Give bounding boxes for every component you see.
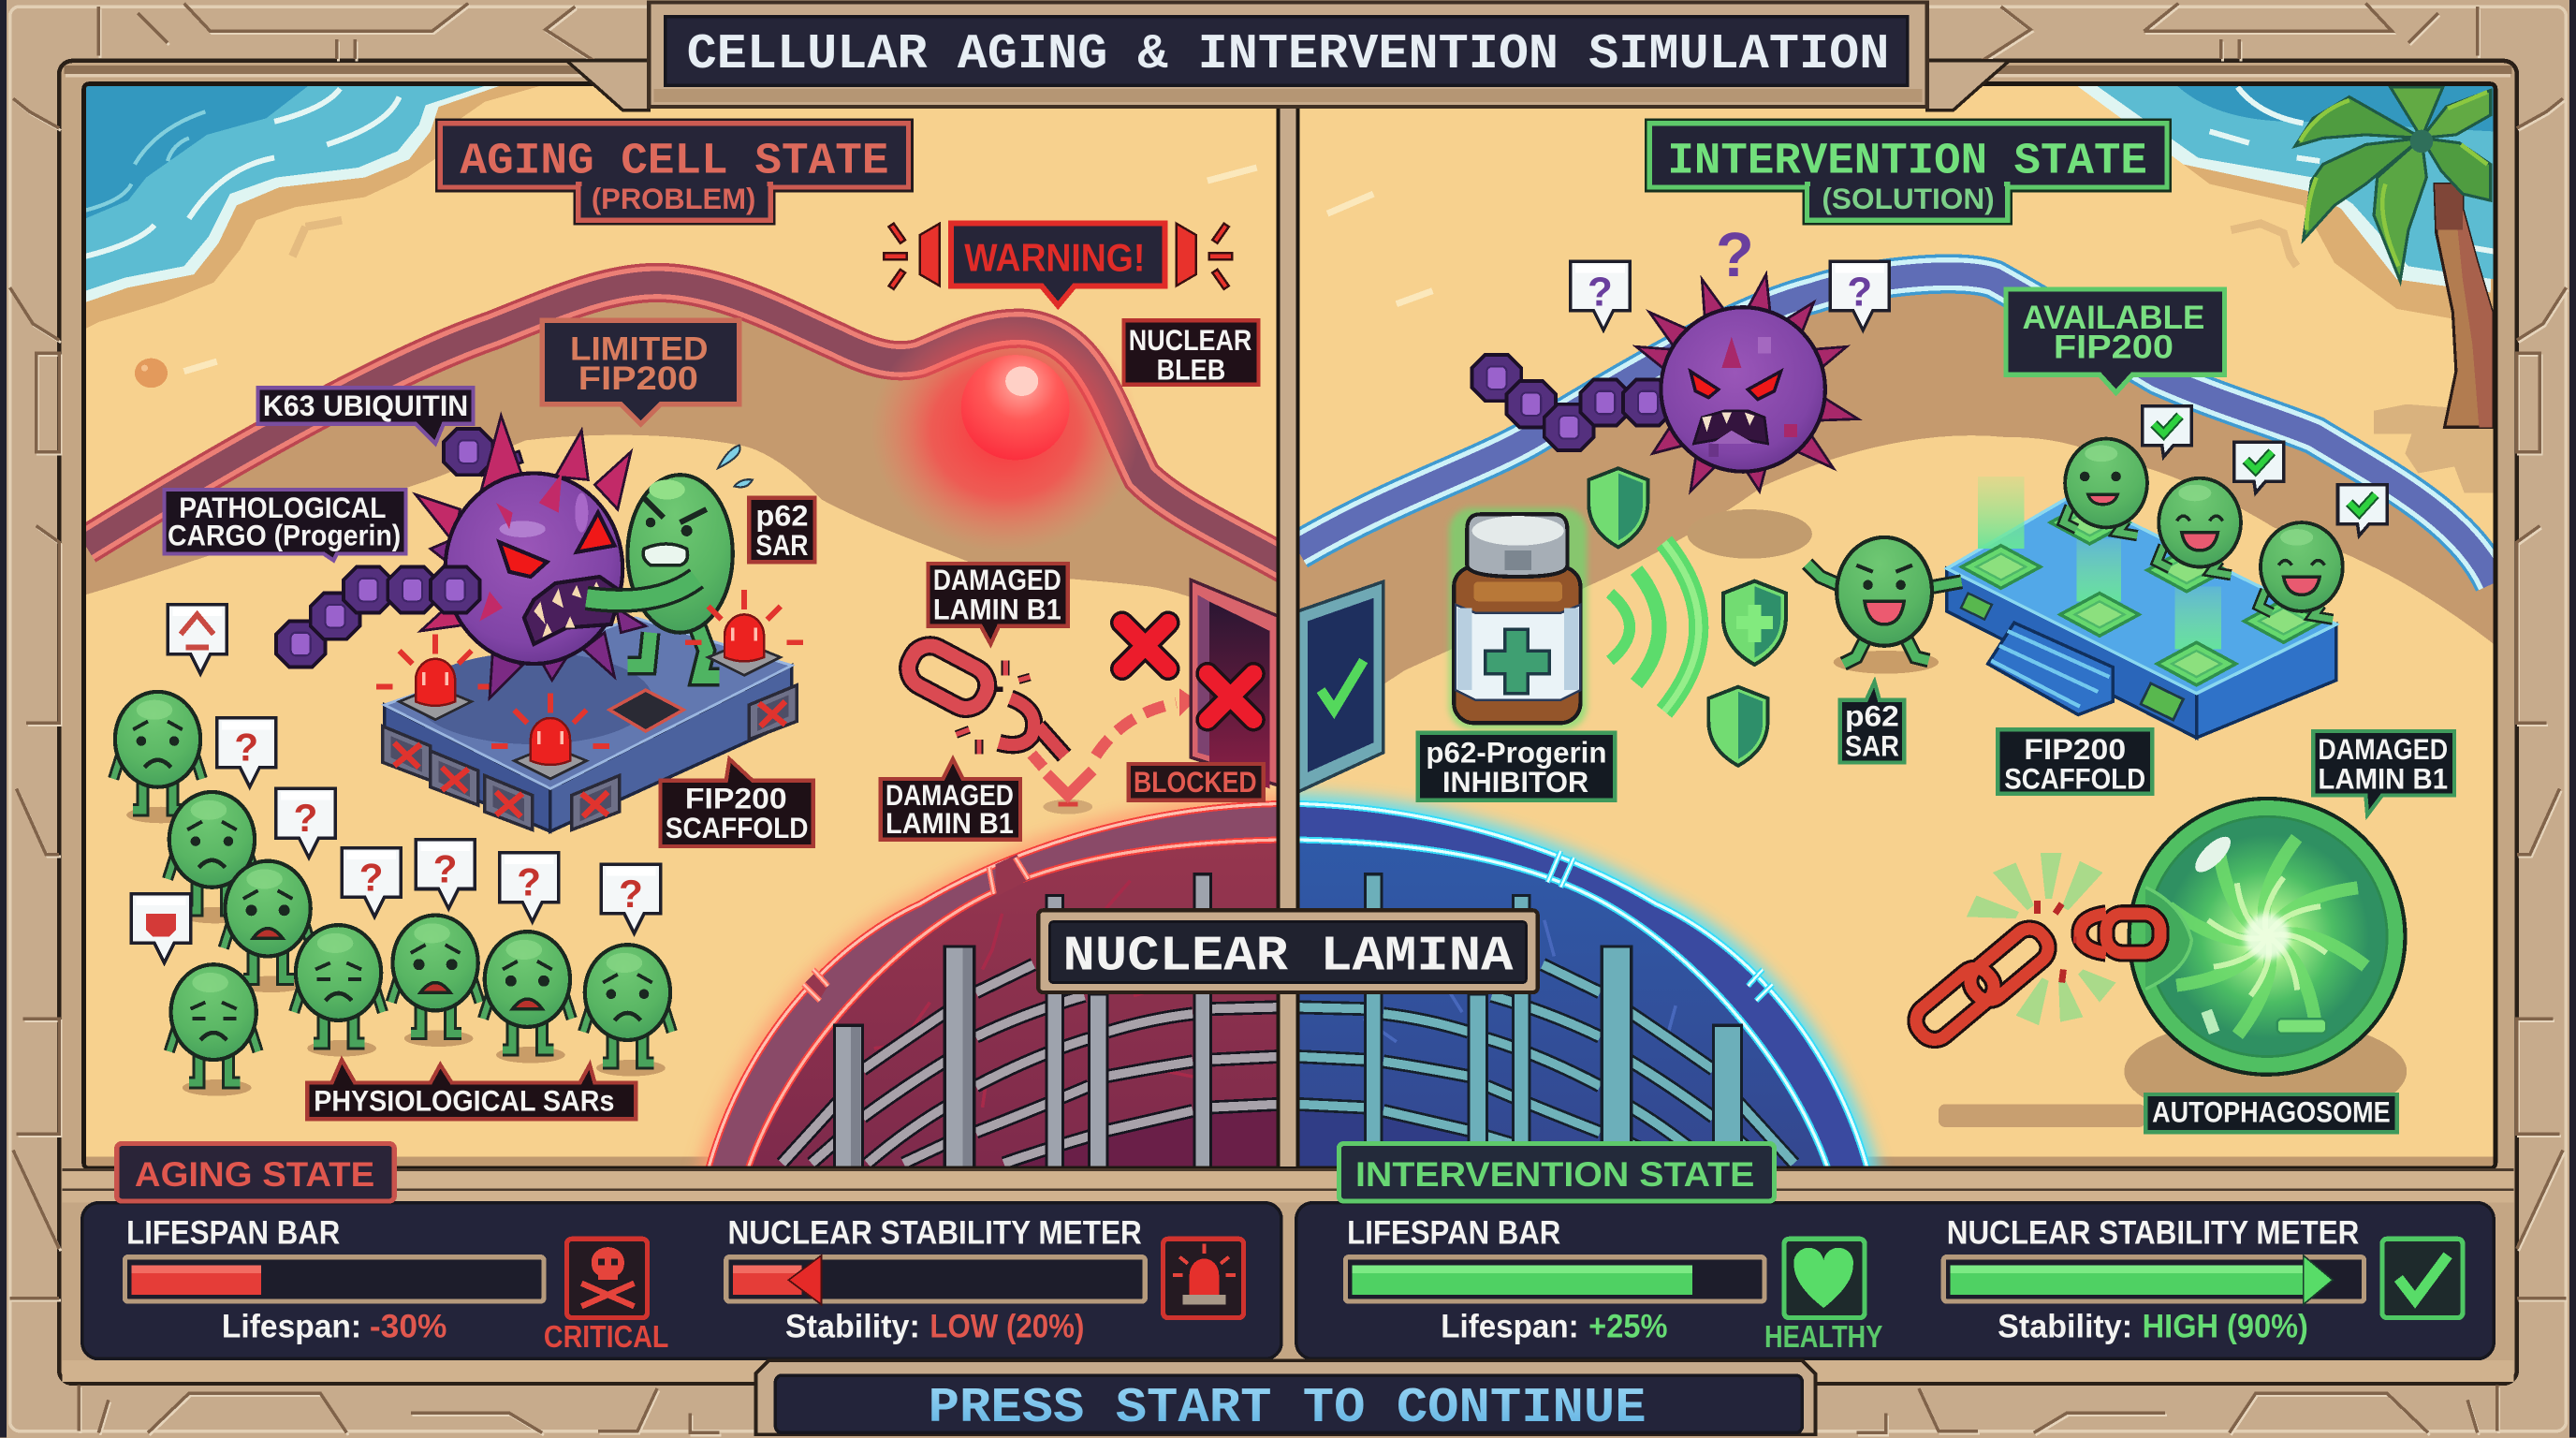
label: limited FIP200: LIMITED (570, 330, 708, 367)
label: autophagosome: AUTOPHAGOSOME (2152, 1095, 2391, 1129)
panel: intervention status HUD (1296, 1144, 2494, 1358)
brown nucleus interior right (1299, 294, 2494, 683)
autophagosome (2130, 799, 2405, 1075)
p62 SAR angry (627, 475, 733, 677)
question bubbles (217, 718, 661, 933)
FIP200 scaffold platform (376, 618, 797, 831)
intervention state heading (1649, 124, 2167, 220)
question bubbles: ? (359, 855, 384, 899)
label: available FIP200 (2006, 289, 2224, 392)
label: p62-Progerin inhibitor: p62-Progerin (1426, 735, 1606, 769)
virus: pathological cargo (416, 416, 646, 698)
label: K63 ubiquitin (258, 388, 473, 444)
confused question marks: ? (1588, 269, 1613, 315)
stability meter: NUCLEAR STABILITY METER (728, 1215, 1142, 1252)
nuclear membrane right (1298, 274, 2494, 583)
sand shadows (1687, 509, 1812, 559)
press start bar (755, 1360, 1815, 1436)
ubiquitin next to virus (431, 567, 479, 613)
lifespan bar: Lifespan: (222, 1309, 361, 1345)
nuclear lamina dome, blue intervention half (1286, 803, 1868, 1170)
label: nuclear bleb: BLEB (1157, 352, 1225, 386)
intervention state heading: (SOLUTION) (1822, 182, 1995, 215)
stability meter: NUCLEAR STABILITY METER (1947, 1215, 2359, 1252)
label: pathological cargo: PATHOLOGICAL (179, 491, 386, 524)
label: p62 SAR aging: SAR (755, 528, 809, 562)
label: available FIP200: AVAILABLE (2023, 300, 2204, 336)
label: FIP200 scaffold intervention: FIP200 (2024, 732, 2126, 766)
lifespan bar (124, 1215, 544, 1345)
label: pathological cargo (165, 490, 406, 560)
warning callout: WARNING! (964, 236, 1145, 280)
question bubbles: ? (234, 726, 258, 770)
label: damaged lamin B1 upper: DAMAGED (933, 563, 1061, 596)
question bubbles: ? (433, 846, 458, 890)
check icon (2382, 1239, 2463, 1318)
label: FIP200 scaffold intervention (1998, 729, 2152, 795)
label: FIP200 scaffold aging (661, 759, 813, 846)
label: nuclear bleb (1123, 320, 1258, 386)
label: damaged lamin B1 upper: LAMIN B1 (933, 593, 1061, 626)
red X marks (1122, 623, 1253, 720)
question bubbles: ? (517, 860, 541, 904)
dashed blocked arrow (1032, 688, 1196, 814)
question bubbles: ? (294, 796, 317, 840)
label: p62 SAR intervention: p62 (1845, 699, 1899, 733)
lifespan bar: +25% (1588, 1309, 1667, 1345)
label: p62-Progerin inhibitor (1418, 733, 1615, 800)
label: FIP200 scaffold aging: FIP200 (685, 782, 787, 815)
virus: free cargo (1636, 274, 1858, 492)
blue FIP200 platform (1947, 477, 2336, 738)
skull icon: CRITICAL (544, 1320, 668, 1355)
nuclear lamina label (1038, 910, 1538, 992)
happy SARs on platform (2063, 439, 2343, 620)
red nuclear bleb (871, 309, 1140, 552)
siren right (685, 590, 803, 675)
scene border (84, 84, 2496, 1168)
shields (1588, 468, 1786, 766)
label: damaged lamin B1 lower: DAMAGED (886, 778, 1014, 812)
label: blocked: BLOCKED (1134, 765, 1257, 799)
stability meter (1943, 1215, 2364, 1345)
aging cell state heading: AGING CELL STATE (460, 137, 889, 186)
warning callout (884, 224, 1232, 305)
label: damaged lamin B1 intervention: DAMAGED (2318, 732, 2448, 766)
aging state tab (117, 1144, 394, 1201)
scene background: beach and cell interior (85, 85, 2494, 1167)
palm tree (2295, 87, 2492, 427)
lifespan bar: LIFESPAN BAR (126, 1215, 340, 1252)
label: available FIP200: FIP200 (2054, 330, 2174, 366)
label: FIP200 scaffold aging: SCAFFOLD (666, 811, 809, 844)
aging cell state heading (440, 124, 909, 220)
signal waves (1610, 542, 1699, 712)
press start bar: PRESS START TO CONTINUE (929, 1380, 1647, 1436)
panel: aging cell state (113, 416, 1278, 1096)
p62 SAR happy (1808, 537, 1962, 674)
right sea (2184, 165, 2494, 318)
heart icon (1764, 1239, 1882, 1355)
left sea (85, 85, 542, 329)
red chain (1910, 901, 2160, 1047)
label: p62 SAR intervention: SAR (1845, 728, 1899, 762)
check bubbles (2143, 406, 2387, 536)
bubble icons: broken membrane (131, 605, 227, 962)
heart icon: HEALTHY (1764, 1320, 1882, 1355)
lower frame band (63, 1170, 2513, 1382)
p62 SAR arm (587, 579, 696, 600)
inhibitor bottle (1449, 507, 1587, 729)
panel: aging status HUD (82, 1144, 1281, 1358)
lifespan bar: -30% (370, 1309, 446, 1345)
label: damaged lamin B1 lower (881, 759, 1020, 840)
lifespan bar: LIFESPAN BAR (1347, 1215, 1560, 1252)
aging state tab: AGING STATE (135, 1155, 374, 1194)
label: damaged lamin B1 intervention: LAMIN B1 (2318, 761, 2448, 795)
stability meter: LOW (20%) (929, 1309, 1084, 1345)
stability meter: Stability: (1998, 1309, 2132, 1345)
label: p62-Progerin inhibitor: INHIBITOR (1442, 765, 1588, 799)
ubiquitin chain free (1472, 355, 1673, 450)
checkpoint door (1298, 581, 1383, 792)
stability meter: Stability: (785, 1309, 920, 1345)
aging cell state heading: (PROBLEM) (592, 182, 755, 215)
sweat drops (718, 446, 753, 487)
brown nucleus interior left (86, 302, 1277, 614)
stability meter: HIGH (90%) (2143, 1309, 2308, 1345)
lifespan bar (1345, 1215, 1764, 1345)
title: CELLULAR AGING & INTERVENTION SIMULATION (687, 26, 1889, 82)
label: K63 ubiquitin: K63 UBIQUITIN (263, 389, 468, 422)
label: nuclear bleb: NUCLEAR (1129, 323, 1252, 357)
stability meter (726, 1215, 1145, 1345)
intervention state tab: INTERVENTION STATE (1355, 1155, 1754, 1194)
intervention state tab (1339, 1144, 1775, 1201)
label: FIP200 scaffold intervention: SCAFFOLD (2004, 761, 2145, 795)
label: damaged lamin B1 intervention (2313, 731, 2454, 815)
label: pathological cargo: CARGO (Progerin) (168, 519, 401, 552)
lifespan bar: Lifespan: (1441, 1309, 1579, 1345)
label: p62 SAR aging (749, 498, 815, 562)
alarm icon (1164, 1239, 1244, 1318)
sad SAR crowd (113, 692, 672, 1096)
panel: intervention state (1298, 221, 2405, 1075)
question bubbles: ? (619, 872, 643, 916)
confused question marks: ? (1847, 269, 1872, 315)
confused question marks (1571, 221, 1889, 330)
nuclear lamina dome, red aging half (708, 803, 1290, 1170)
title (649, 2, 1927, 107)
green burst rays (1967, 853, 2116, 1025)
label: physiological SARs: PHYSIOLOGICAL SARs (314, 1083, 614, 1117)
nuclear membrane left (85, 283, 1290, 567)
label: limited FIP200: FIP200 (578, 360, 698, 397)
label: p62 SAR aging: p62 (755, 499, 809, 533)
ubiquitin chain (276, 429, 522, 668)
label: damaged lamin B1 upper (929, 563, 1068, 644)
label: p62 SAR intervention (1840, 682, 1904, 762)
label: physiological SARs (307, 1060, 636, 1119)
skull icon (544, 1239, 668, 1355)
nuclear lamina label: NUCLEAR LAMINA (1063, 929, 1514, 985)
confused question marks: ? (1716, 221, 1754, 290)
lamin door (1191, 580, 1278, 788)
broken chain: damaged lamin B1 (901, 638, 1064, 756)
label: damaged lamin B1 lower: LAMIN B1 (886, 806, 1014, 840)
intervention state heading: INTERVENTION STATE (1667, 137, 2147, 186)
warning speakers (884, 224, 1232, 289)
starfish (135, 359, 168, 388)
label: limited FIP200 (542, 320, 739, 424)
title bracket corners (567, 61, 2009, 110)
